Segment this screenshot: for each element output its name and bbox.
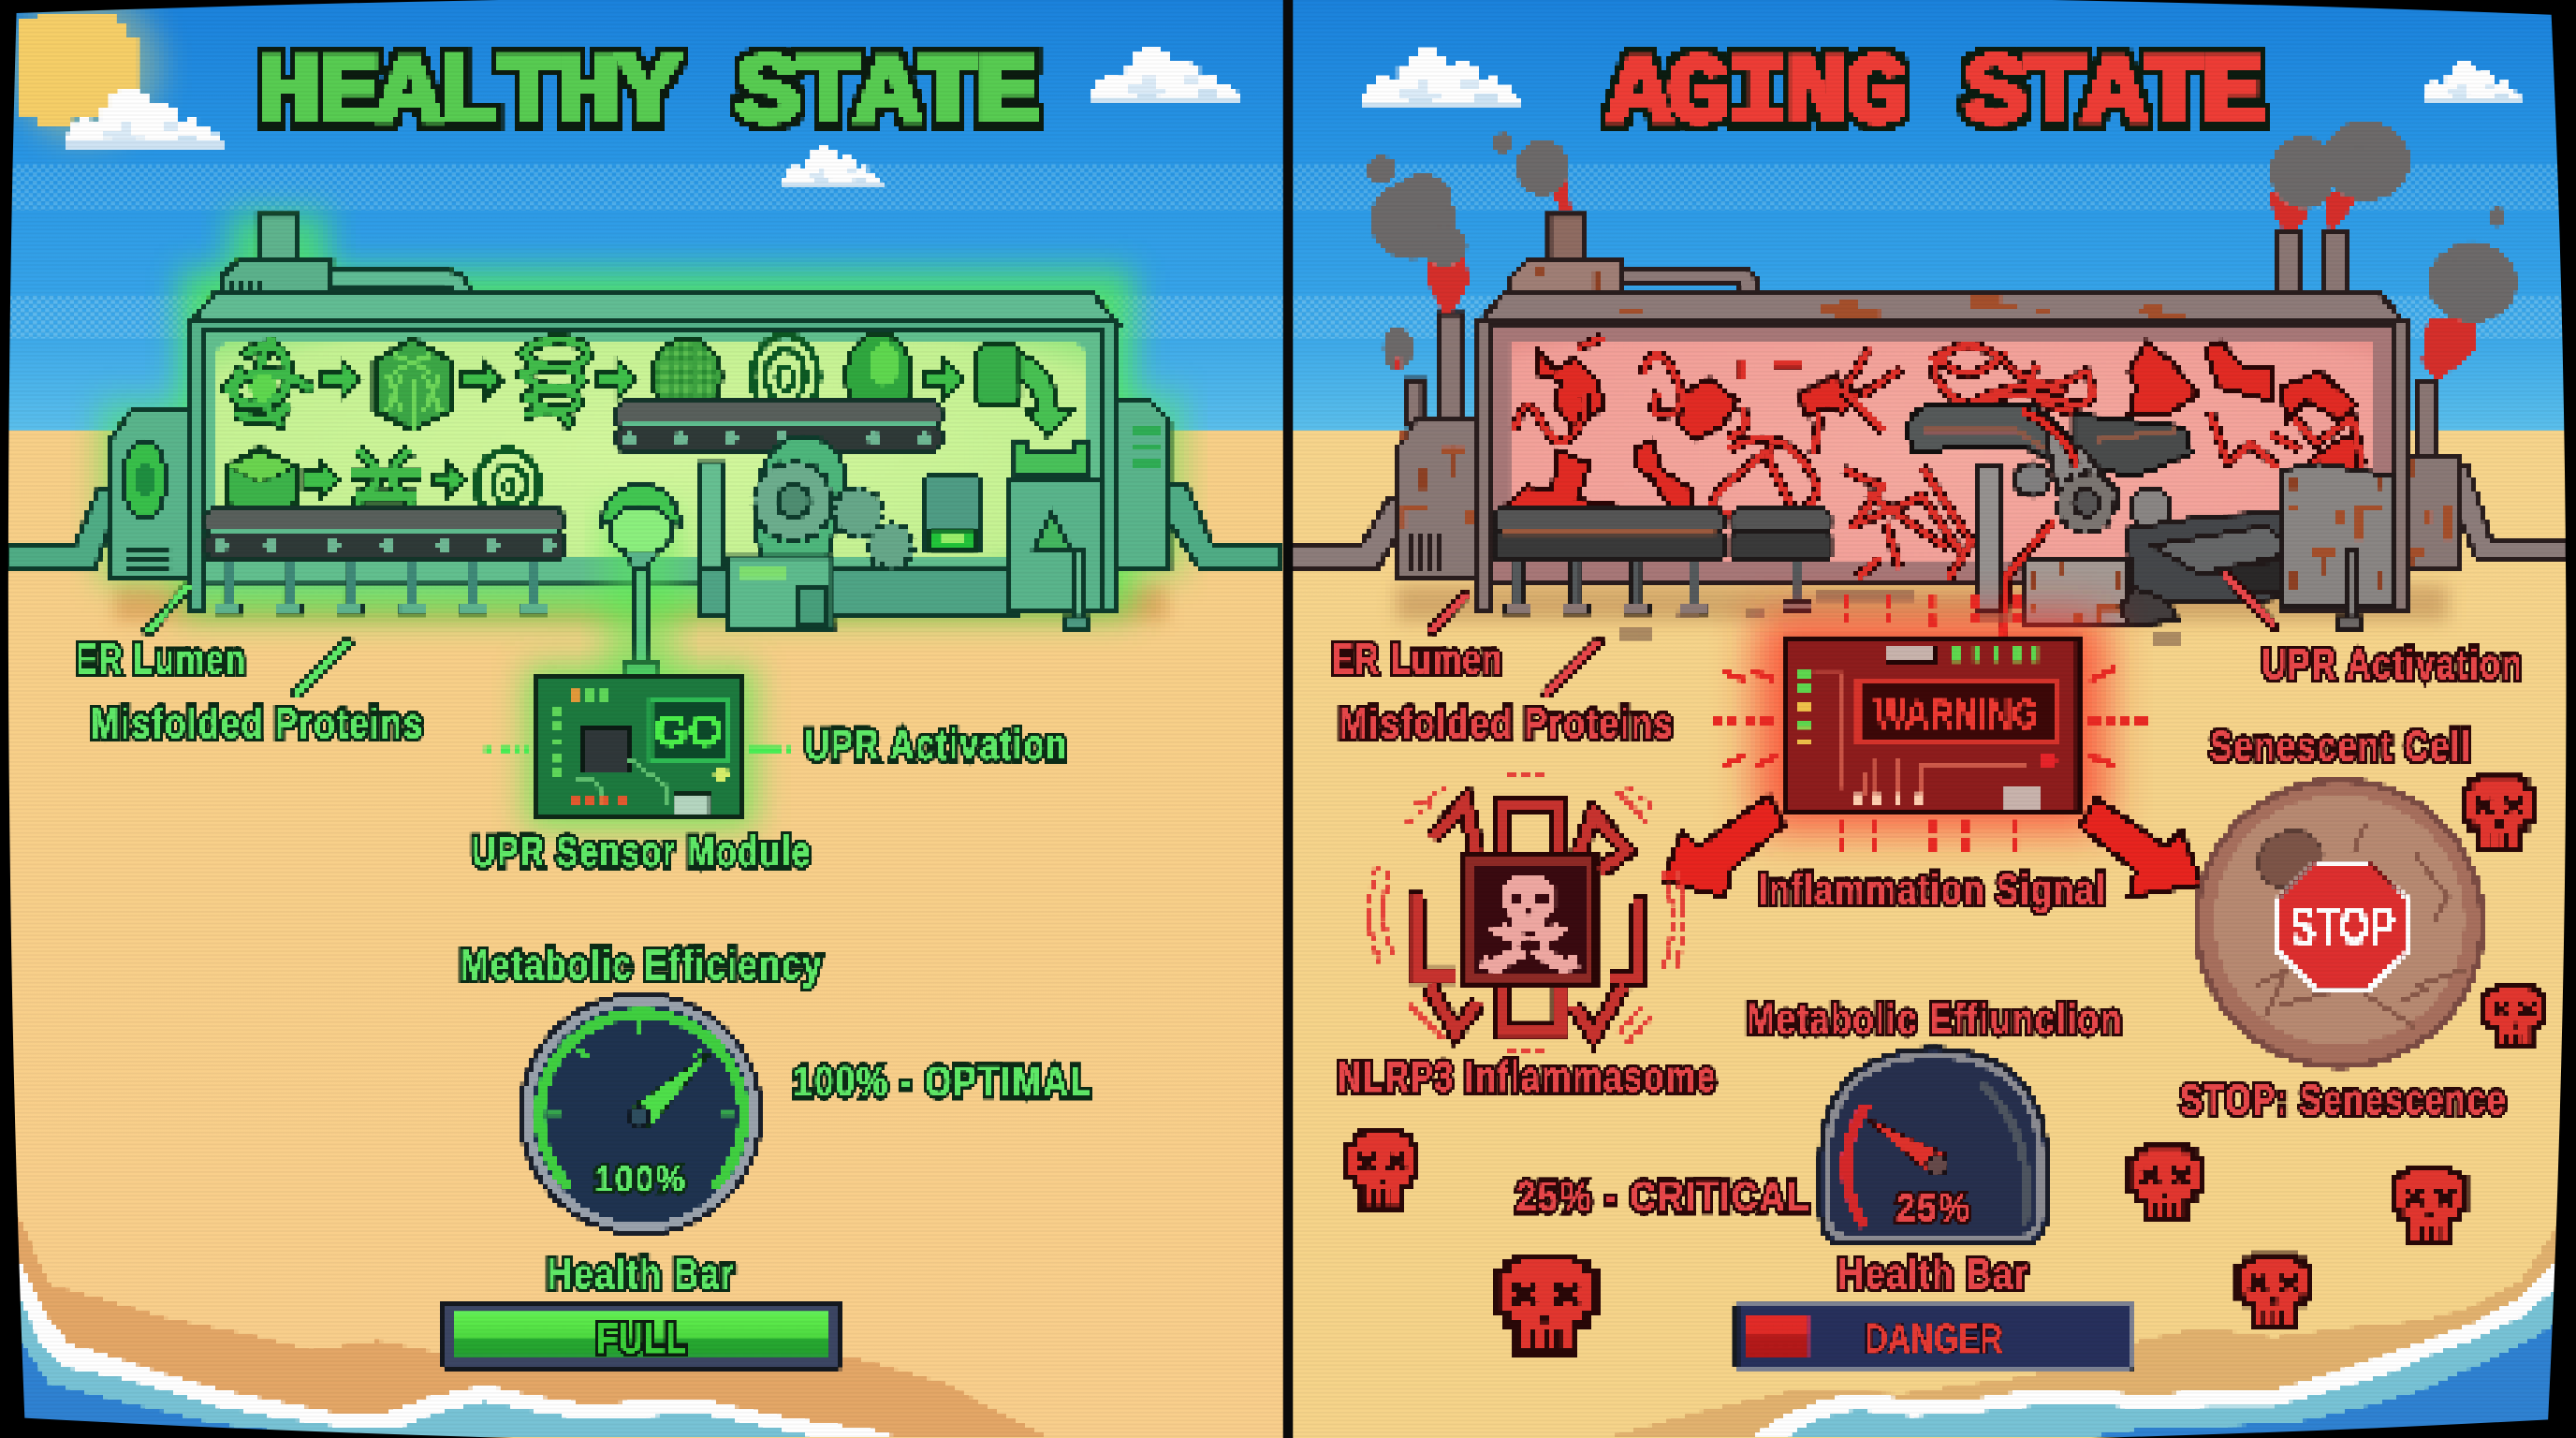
background: sand left (0, 431, 1284, 1438)
center divider (1283, 0, 1293, 1438)
icon: cloud (783, 147, 884, 187)
label: stop: STOP (2291, 897, 2395, 956)
label: er lumen: ER Lumen (1332, 636, 1503, 683)
label: go: GO (654, 707, 723, 756)
icon: arrow (304, 462, 340, 498)
icon: arrow (598, 360, 637, 399)
icon: arrow (460, 360, 503, 399)
icon: block (227, 447, 296, 522)
factory: healthy machine (7, 213, 1281, 627)
health bar label: Health Bar (1838, 1250, 2029, 1298)
icon: skull (1347, 1132, 1416, 1208)
conveyor: bottom (205, 507, 564, 614)
label: misfolded proteins: Misfolded Proteins (1339, 699, 1674, 747)
icon: coil (522, 340, 587, 424)
artwork: healthy scene (0, 0, 1281, 1438)
icon: skull (2465, 777, 2533, 850)
skull and crossbones (1479, 875, 1580, 973)
icon: nlrp3 inflammasome (1369, 775, 1684, 1049)
labels: healthy state (76, 636, 1092, 1361)
icon: cube (374, 339, 452, 431)
background: sky right (1292, 0, 2576, 433)
icon: output chute (977, 345, 1071, 437)
icon: skull (2483, 985, 2545, 1048)
panel: aging state (1292, 0, 2576, 1438)
label: 25% critical: 25% - CRITICAL (1516, 1172, 1810, 1220)
background: sky left (0, 0, 1284, 433)
warning rays (1712, 594, 2152, 855)
callout line: misfolded proteins (1547, 642, 1599, 694)
label: upr sensor module: UPR Sensor Module (472, 828, 812, 875)
body frame (189, 322, 1117, 611)
icon: folded ball (652, 339, 721, 414)
gauge: metabolic efficiency 100% (520, 994, 761, 1234)
conveyor legs (215, 562, 547, 614)
side units (110, 401, 1170, 577)
health bar label: Health Bar (547, 1250, 736, 1298)
icon: cloud (2423, 62, 2524, 104)
icon: arrow (320, 360, 361, 399)
smoke plumes (1367, 122, 2517, 381)
label: danger: DANGER (1865, 1315, 2002, 1361)
arrow: to inflammasome (1662, 795, 1784, 897)
icon: sun (10, 0, 161, 141)
label: upr activation: UPR Activation (805, 721, 1068, 769)
label: full: FULL (596, 1313, 687, 1361)
icon: spiral (476, 450, 539, 520)
artwork: aging scene (1292, 49, 2576, 1438)
label: nlrp3 inflammasome: NLRP3 Inflammasome (1338, 1052, 1717, 1100)
callout line: er lumen (148, 588, 187, 631)
callout line: er lumen (1432, 594, 1466, 629)
ripple arcs (1369, 775, 1684, 1049)
title: healthy state: HEALTHY STATE (256, 39, 1036, 153)
icon: arrow (923, 360, 964, 399)
red cables (2002, 411, 2076, 636)
icon: skull (2238, 1255, 2310, 1327)
conveyor: top (616, 401, 942, 452)
circuit: upr sensor module (485, 666, 792, 829)
beach: right shoreline (1600, 1212, 2576, 1438)
arrow: to senescent cell (2080, 799, 2202, 897)
icon: sphere (846, 333, 912, 419)
conveyor: broken top (1908, 404, 2191, 477)
background: sand right (1292, 431, 2576, 1438)
title: aging state: AGING STATE (1606, 39, 2261, 153)
label: er lumen: ER Lumen (76, 636, 246, 683)
machinery: gears and assembly (698, 435, 1104, 627)
icon: cloud (1362, 49, 1523, 109)
misfolded proteins (1505, 342, 2359, 529)
label: metabolic effiunclion: Metabolic Effiunclion (1747, 995, 2123, 1043)
icon: tangled peptide (227, 342, 309, 424)
icon: skull (2393, 1168, 2466, 1242)
roof (1479, 292, 2405, 324)
health bar: danger (1736, 1303, 2132, 1369)
labels: aging state (1332, 636, 2524, 1361)
factory: aging machine (1292, 215, 2569, 644)
icon: skull (2130, 1147, 2202, 1221)
protein folding items bottom row (227, 447, 539, 522)
open base band (204, 585, 713, 614)
label: senescent cell: Senescent Cell (2210, 723, 2472, 770)
callout line: upr activation (2226, 575, 2274, 626)
pipes (7, 485, 1281, 568)
label: gauge 100%: 100% (594, 1159, 687, 1199)
callout line: misfolded proteins (296, 642, 348, 694)
label: gauge 25%: 25% (1895, 1185, 1971, 1229)
label: misfolded proteins: Misfolded Proteins (91, 699, 424, 747)
side units (1398, 419, 2458, 577)
label: metabolic efficiency: Metabolic Efficiency (460, 941, 823, 989)
machinery: broken gears and rubble (1978, 431, 2392, 627)
sand rubble (1618, 588, 2182, 644)
icon: knot (352, 450, 420, 517)
protein folding items top row (227, 333, 1071, 437)
connector: sensor stalk (601, 485, 681, 690)
label: inflammation signal: Inflammation Signal (1758, 865, 2106, 913)
tangled protein strands (1515, 337, 2363, 579)
chimney and pipe (1512, 215, 1758, 305)
icon: senescent cell (2197, 781, 2482, 1066)
icon: cloud (1092, 48, 1242, 104)
label: 100% optimal: 100% - OPTIMAL (794, 1058, 1092, 1106)
circuit: warning module (1712, 594, 2152, 855)
chimney and pipe (222, 215, 470, 307)
roof (191, 291, 1117, 324)
pipes (1292, 466, 2569, 570)
conveyor legs (1505, 562, 1810, 614)
beach: left shoreline (0, 1216, 1051, 1438)
icon: cloud (66, 89, 224, 150)
icon: arrow (432, 463, 465, 496)
icon: skull (1497, 1256, 1595, 1353)
conveyor: broken bottom (1493, 509, 1830, 614)
body frame (1479, 322, 2407, 609)
arms (1416, 801, 1640, 1035)
er lumen window (217, 344, 1084, 559)
stop sign (2278, 862, 2407, 990)
panel: healthy state (0, 0, 1284, 1438)
label: warning: WARNING (1875, 691, 2039, 737)
gauge: metabolic 25% (1821, 1049, 2047, 1244)
health bar: full (444, 1303, 840, 1369)
stacks (1406, 233, 2437, 455)
er lumen window (1510, 344, 2372, 564)
icon: spiral (753, 335, 818, 418)
